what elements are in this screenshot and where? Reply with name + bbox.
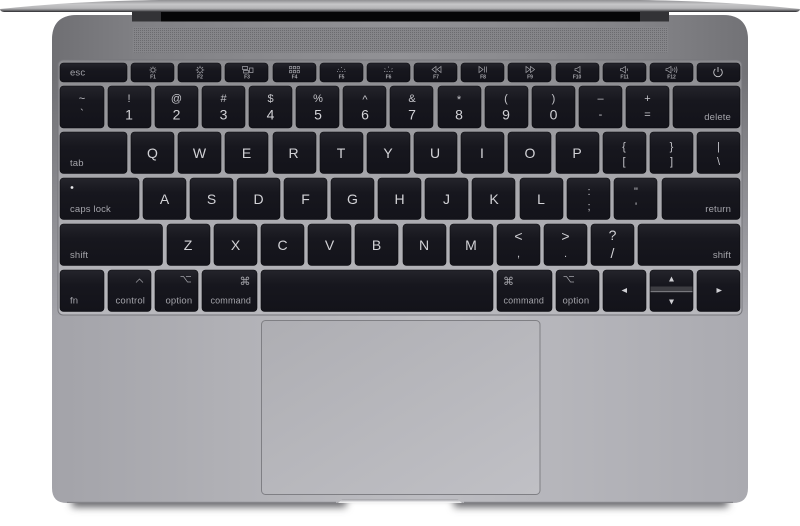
key: T: T xyxy=(337,145,346,161)
key: U xyxy=(414,132,457,174)
key: F12 xyxy=(650,63,693,82)
key: 9: ( xyxy=(504,93,508,105)
key: F9 xyxy=(508,63,551,82)
key: K: K xyxy=(489,191,499,207)
key: minus xyxy=(579,86,622,128)
key: F5 xyxy=(320,63,363,82)
key: left bracket: { xyxy=(622,141,626,153)
key: 3: # xyxy=(220,93,227,105)
key: caps lock xyxy=(60,178,139,220)
key: return xyxy=(662,178,740,220)
key: fn: fn xyxy=(70,296,78,306)
key: return: return xyxy=(705,204,731,215)
key: slash: ? xyxy=(609,227,617,243)
key: M xyxy=(450,224,493,266)
key: power xyxy=(697,63,740,82)
key: 3 xyxy=(202,86,245,128)
key: left command: command xyxy=(210,296,251,306)
key: 1: 1 xyxy=(125,106,133,122)
key: F7 xyxy=(414,63,457,82)
key: slash: / xyxy=(611,245,615,261)
key: G: G xyxy=(347,191,358,207)
key: C: C xyxy=(277,237,288,253)
key: F5: F5 xyxy=(339,74,345,80)
key: Z: Z xyxy=(184,237,193,253)
key: left command: ⌘ xyxy=(240,275,250,288)
key: right shift xyxy=(638,224,740,266)
key: Q xyxy=(131,132,174,174)
key: F2: F2 xyxy=(197,74,203,80)
key: minus: – xyxy=(597,93,604,105)
ASDF key row xyxy=(60,178,740,220)
key: B xyxy=(355,224,398,266)
key: F3: F3 xyxy=(244,74,250,80)
key: F2 xyxy=(178,63,221,82)
key: H xyxy=(378,178,421,220)
key: left shift xyxy=(60,224,162,266)
key: left shift: shift xyxy=(70,250,88,261)
key: control: control xyxy=(116,296,145,306)
key: 7 xyxy=(390,86,433,128)
key: period xyxy=(544,224,587,266)
key: left bracket xyxy=(603,132,646,174)
key: fn xyxy=(60,270,104,312)
key: esc: esc xyxy=(70,68,85,78)
key: quote xyxy=(614,178,657,220)
key: equals xyxy=(626,86,669,128)
key: F8: F8 xyxy=(480,74,486,80)
QWERTY key row xyxy=(60,132,740,174)
key: right bracket xyxy=(650,132,693,174)
hinge xyxy=(132,12,669,22)
key: L xyxy=(520,178,563,220)
key: 1: ! xyxy=(127,93,131,105)
key: equals: = xyxy=(644,109,651,121)
key: backslash: | xyxy=(717,141,720,153)
key: minus: - xyxy=(599,109,603,121)
key: left arrow xyxy=(603,270,646,312)
bottom modifier key row xyxy=(60,270,740,312)
key: F11: F11 xyxy=(620,74,629,80)
laptop lid edge xyxy=(0,0,800,12)
key: period: > xyxy=(561,228,570,244)
key: 6: 6 xyxy=(361,106,369,122)
key: 2 xyxy=(155,86,198,128)
key: tilde xyxy=(60,86,104,128)
key: F6 xyxy=(367,63,410,82)
key: P: P xyxy=(572,145,582,161)
key: semicolon xyxy=(567,178,610,220)
key: L: L xyxy=(537,191,545,207)
key: F4: F4 xyxy=(292,74,298,80)
key: 2: 2 xyxy=(173,106,181,122)
key: space bar xyxy=(261,270,493,312)
key: right bracket: ] xyxy=(670,156,673,168)
key: tilde: ~ xyxy=(79,93,85,105)
key: right option xyxy=(556,270,599,312)
key: right arrow xyxy=(697,270,740,312)
key: quote: " xyxy=(634,186,638,198)
key: N: N xyxy=(419,237,429,253)
key: Q: Q xyxy=(147,145,158,161)
key: up and down arrows xyxy=(650,270,693,312)
key: 9: 9 xyxy=(502,106,510,122)
key: 4: 4 xyxy=(267,106,275,122)
key: F1: F1 xyxy=(150,74,156,80)
key: I: I xyxy=(480,145,484,161)
key: H: H xyxy=(394,191,405,207)
key: B: B xyxy=(372,237,381,253)
keyboard well xyxy=(58,60,742,315)
key: D: D xyxy=(253,191,264,207)
key: right option: option xyxy=(562,296,589,306)
key: N xyxy=(403,224,446,266)
key: 6 xyxy=(343,86,386,128)
key: O xyxy=(508,132,551,174)
key: F10 xyxy=(556,63,599,82)
key: left option: option xyxy=(166,296,192,306)
key: 8: * xyxy=(457,94,462,106)
key: 6: ^ xyxy=(362,94,368,106)
key: 5 xyxy=(296,86,339,128)
key: right shift: shift xyxy=(713,250,731,261)
key: 7: & xyxy=(408,93,416,105)
key: X xyxy=(214,224,257,266)
key: K xyxy=(472,178,515,220)
key: 0 xyxy=(532,86,575,128)
key: W: W xyxy=(193,145,207,161)
key: tab xyxy=(60,132,127,174)
key: 5: % xyxy=(313,93,323,105)
key: semicolon: ; xyxy=(587,201,591,213)
key: E xyxy=(225,132,268,174)
key: right command xyxy=(497,270,552,312)
key: J: J xyxy=(443,191,450,207)
trackpad xyxy=(262,320,540,494)
speaker grille xyxy=(133,27,668,52)
key: W xyxy=(178,132,221,174)
key: backslash xyxy=(697,132,740,174)
key: quote: ' xyxy=(635,201,637,213)
key: F10: F10 xyxy=(573,74,582,80)
key: G xyxy=(331,178,374,220)
key: P xyxy=(556,132,599,174)
key: X: X xyxy=(231,237,241,253)
ZXCV key row xyxy=(60,224,740,266)
function key row xyxy=(60,63,740,82)
key: M: M xyxy=(465,237,477,253)
key: F11 xyxy=(603,63,646,82)
key: esc xyxy=(60,63,127,82)
key: U: U xyxy=(430,145,440,161)
key: F9: F9 xyxy=(527,74,533,80)
key: C xyxy=(261,224,304,266)
key: Y xyxy=(367,132,410,174)
key: left command xyxy=(202,270,257,312)
key: equals: + xyxy=(644,93,651,105)
key: left bracket: [ xyxy=(622,156,626,168)
key: T xyxy=(320,132,363,174)
key: 4 xyxy=(249,86,292,128)
key: 0: ) xyxy=(552,93,555,105)
key: semicolon: : xyxy=(587,186,591,198)
key: 3: 3 xyxy=(220,106,228,122)
key: control xyxy=(108,270,151,312)
number key row xyxy=(60,86,740,128)
key: F6: F6 xyxy=(386,74,392,80)
key: 9 xyxy=(485,86,528,128)
key: F4 xyxy=(273,63,316,82)
key: S: S xyxy=(207,191,216,207)
key: F8 xyxy=(461,63,504,82)
key: I xyxy=(461,132,504,174)
key: F7: F7 xyxy=(433,74,439,80)
key: comma: , xyxy=(517,248,520,260)
key: 4: $ xyxy=(267,93,274,105)
key: backslash: \ xyxy=(717,156,721,168)
key: slash xyxy=(591,224,634,266)
key: 7: 7 xyxy=(408,106,416,122)
key: F xyxy=(284,178,327,220)
key: 1 xyxy=(108,86,151,128)
key: A xyxy=(143,178,186,220)
key: D xyxy=(237,178,280,220)
key: V xyxy=(308,224,351,266)
key: comma: < xyxy=(514,228,523,244)
key: A: A xyxy=(160,191,170,207)
key: J xyxy=(425,178,468,220)
key: comma xyxy=(497,224,540,266)
key: caps lock: caps lock xyxy=(70,204,111,215)
key: 8: 8 xyxy=(455,106,463,122)
key: tab: tab xyxy=(70,158,84,169)
key: R xyxy=(273,132,316,174)
key: 2: @ xyxy=(171,93,182,105)
key: period: . xyxy=(564,248,567,260)
key: 8 xyxy=(438,86,481,128)
key: F3 xyxy=(225,63,268,82)
key: V: V xyxy=(325,237,335,253)
key: F1 xyxy=(131,63,174,82)
key: right command: ⌘ xyxy=(503,275,514,288)
key: S xyxy=(190,178,233,220)
key: Y: Y xyxy=(383,145,393,161)
key: delete: delete xyxy=(704,112,731,123)
key: F: F xyxy=(301,191,310,207)
key: E: E xyxy=(242,145,251,161)
key: F12: F12 xyxy=(667,74,676,80)
key: Z xyxy=(167,224,210,266)
key: O: O xyxy=(525,145,536,161)
key: delete xyxy=(673,86,740,128)
key: left option xyxy=(155,270,198,312)
key: right command: command xyxy=(504,296,544,306)
key: R: R xyxy=(288,145,299,161)
key: tilde: ` xyxy=(80,108,84,120)
key: 5: 5 xyxy=(314,106,322,122)
key: 0: 0 xyxy=(550,106,558,122)
shadow under laptop base xyxy=(72,496,728,522)
key: right bracket: } xyxy=(670,141,674,153)
